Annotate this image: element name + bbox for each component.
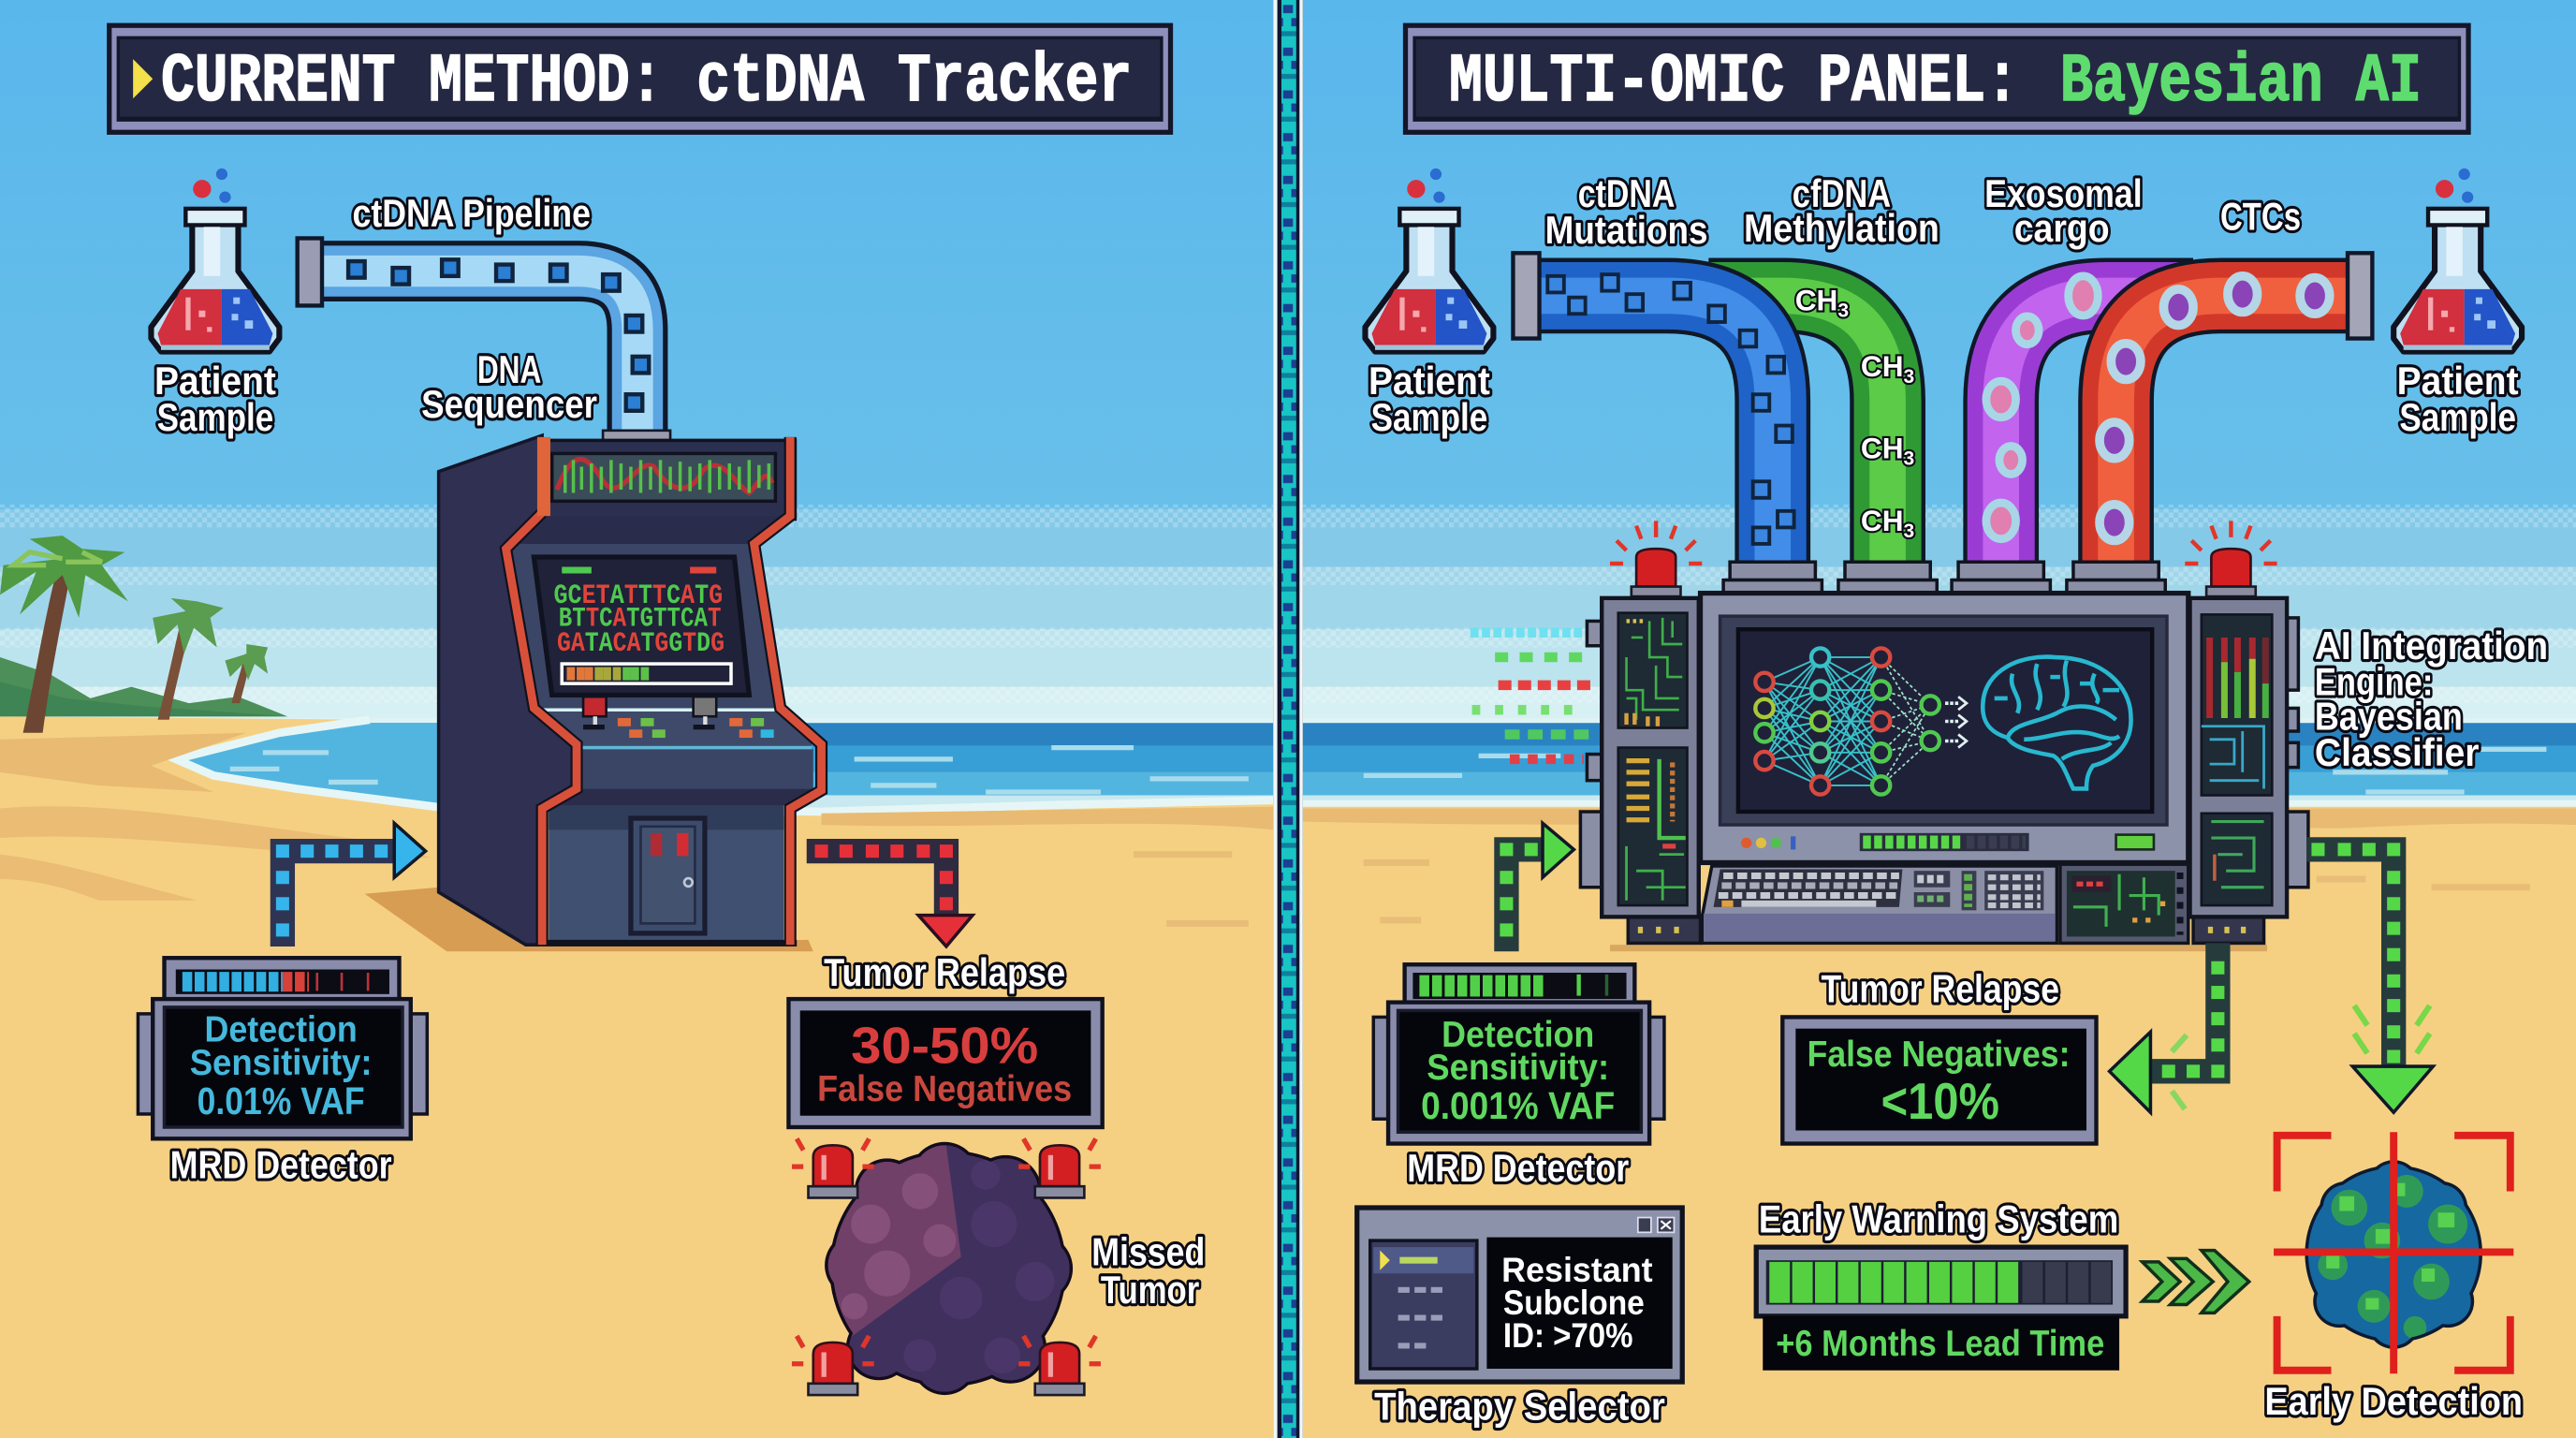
label: MRD detector: MRD Detector	[1407, 1146, 1629, 1190]
readout: resistant subclone: ID: >70%	[1503, 1316, 1633, 1355]
left circuit panels	[1602, 598, 1699, 917]
label: missed tumor: Missed	[1091, 1229, 1205, 1273]
label: patient sample: Patient	[154, 359, 276, 403]
readout: false negatives current: False Negatives	[817, 1069, 1072, 1109]
label: tumor relapse: Tumor Relapse	[824, 950, 1065, 994]
icon: patient sample flask	[151, 169, 279, 352]
label: patient sample: Sample	[157, 395, 273, 439]
label: patient sample right: Sample	[2399, 395, 2516, 439]
title: current method	[107, 23, 1173, 135]
label: patient sample right	[2397, 359, 2519, 439]
arrow: early detection output	[2306, 843, 2433, 1112]
pipe labels: Exosomal	[1984, 171, 2143, 215]
data stream dashes	[1471, 633, 1595, 759]
panel: current method	[0, 23, 1205, 1413]
panel: multi-omic	[1357, 23, 2548, 1428]
MRD detector: multi-omic	[1373, 964, 1664, 1144]
pipe: exosomal cargo	[1986, 276, 2193, 565]
pipe labels: CTCs	[2220, 195, 2301, 239]
pipe labels: Methylation	[1744, 206, 1939, 250]
readout: resistant subclone: Subclone	[1503, 1284, 1645, 1322]
keyboard	[1702, 866, 2056, 943]
right meter and circuit panels	[2190, 598, 2287, 917]
early warning progress bar: +6 Months Lead Time	[1776, 1324, 2104, 1364]
arrow: MRD input green	[1500, 823, 1573, 951]
machine sirens	[1610, 521, 2277, 596]
pipe: ctDNA mutations	[1513, 253, 1794, 565]
label: therapy selector: Therapy Selector	[1374, 1384, 1665, 1428]
label: ctDNA pipeline: ctDNA Pipeline	[352, 191, 591, 235]
control sub-panel	[2060, 864, 2188, 943]
readout: resistant subclone: Resistant	[1501, 1251, 1653, 1289]
label: missed tumor: Tumor	[1101, 1268, 1199, 1312]
pipe labels: ctDNA	[1578, 171, 1675, 215]
brain icon	[1983, 657, 2131, 788]
pipe labels: cargo	[2014, 206, 2110, 250]
label: AI integration engine: Engine:	[2315, 659, 2433, 703]
readout: detection sensitivity	[1421, 1015, 1615, 1127]
readout: detection sensitivity: Detection	[205, 1010, 358, 1050]
label: patient sample left: Patient	[1368, 359, 1490, 403]
early detection tumor target	[2274, 1132, 2513, 1373]
label: DNA sequencer	[421, 347, 597, 426]
label: early warning system: Early Warning System	[1759, 1196, 2118, 1240]
tumor alarm sirens	[792, 1138, 1101, 1395]
readout: false negatives multi-omic: False Negatives:	[1808, 1034, 2070, 1075]
missed tumor blob	[825, 1142, 1073, 1395]
label: DNA sequencer: DNA	[477, 347, 541, 391]
pipe: cfDNA methylation: CH	[1861, 432, 1904, 465]
label: DNA sequencer: Sequencer	[421, 382, 597, 426]
MRD detector: current	[138, 958, 427, 1138]
label: MRD detector: MRD Detector	[170, 1142, 392, 1186]
pipe: cfDNA methylation: 3	[1904, 366, 1914, 388]
status strip	[1741, 833, 2154, 851]
DNA sequencer arcade cabinet	[365, 435, 822, 951]
title: current method: CURRENT METHOD: ctDNA Tracker	[161, 44, 1132, 122]
label: early detection: Early Detection	[2264, 1379, 2523, 1423]
label: AI integration engine	[2315, 624, 2548, 774]
readout: detection sensitivity: Sensitivity:	[190, 1043, 373, 1083]
readout: detection sensitivity: Detection	[1442, 1015, 1594, 1055]
icon: chevrons	[2143, 1251, 2249, 1313]
pipe: cfDNA methylation: 3	[1904, 448, 1914, 470]
DNA sequence readout: GATACATGGTDG	[557, 627, 724, 659]
readout: false negatives multi-omic	[1782, 1017, 2097, 1144]
monitor frame	[1701, 594, 2188, 862]
label: AI integration engine: AI Integration	[2315, 624, 2548, 668]
readout: resistant subclone	[1501, 1251, 1653, 1355]
title: multi-omic panel	[1403, 23, 2471, 135]
readout: detection sensitivity	[190, 1010, 373, 1123]
label: tumor relapse: Tumor Relapse	[1822, 967, 2059, 1011]
readout: detection sensitivity: 0.01% VAF	[198, 1079, 365, 1123]
arrow: relapse output	[807, 844, 973, 946]
pipe labels	[1545, 171, 2301, 252]
pipe: cfDNA methylation	[1708, 284, 1914, 565]
pipe: cfDNA methylation: CH	[1795, 284, 1837, 317]
pipe: CTCs	[2100, 253, 2372, 565]
icon: patient sample flask left	[1365, 169, 1493, 352]
neural network	[1755, 648, 1967, 795]
early warning progress bar	[1756, 1247, 2126, 1371]
pipe: cfDNA methylation: 3	[1837, 301, 1849, 322]
center divider	[1273, 0, 1303, 1438]
island with palm trees	[0, 536, 287, 733]
readout: false negatives current	[788, 999, 1103, 1127]
label: patient sample left	[1368, 359, 1490, 439]
DNA sequence readout: BTTCATGTTCAT	[559, 603, 722, 635]
icon: patient sample flask right	[2393, 169, 2522, 352]
pipe: cfDNA methylation: CH	[1861, 504, 1904, 537]
arrow: false negatives output	[2110, 943, 2224, 1112]
pipe: cfDNA methylation: CH	[1861, 349, 1904, 383]
DNA sequence readout: GCETATTTCATG	[553, 580, 723, 611]
label: patient sample right: Patient	[2397, 359, 2519, 403]
pipe: cfDNA methylation: 3	[1904, 521, 1914, 542]
AI integration machine	[1580, 594, 2308, 951]
pipe collars	[1723, 562, 2165, 594]
DNA sequence readout	[553, 580, 724, 659]
label: patient sample	[154, 359, 276, 439]
readout: false negatives multi-omic: <10%	[1881, 1073, 1999, 1130]
label: missed tumor	[1091, 1229, 1205, 1312]
ctDNA pipeline	[298, 238, 670, 444]
pipe labels: cfDNA	[1793, 171, 1891, 215]
readout: detection sensitivity: 0.001% VAF	[1421, 1084, 1615, 1127]
arrow: MRD input	[276, 823, 426, 946]
title: multi-omic panel: Bayesian AI	[2060, 44, 2422, 122]
therapy selector window	[1357, 1208, 1682, 1382]
monitor screen	[1738, 629, 2152, 812]
label: AI integration engine: Bayesian	[2315, 694, 2463, 738]
label: patient sample left: Sample	[1371, 395, 1487, 439]
pipe labels: Mutations	[1545, 208, 1707, 252]
readout: false negatives current: 30-50%	[851, 1018, 1038, 1075]
title: multi-omic panel: MULTI-OMIC PANEL:	[1449, 44, 2019, 122]
readout: detection sensitivity: Sensitivity:	[1427, 1048, 1609, 1088]
label: AI integration engine: Classifier	[2315, 730, 2479, 774]
